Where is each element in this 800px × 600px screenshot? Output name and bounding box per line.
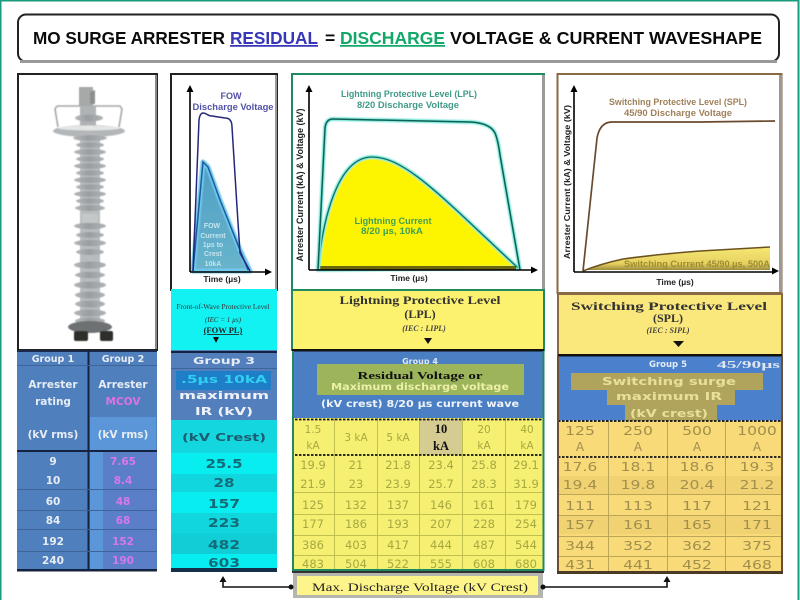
LPL values: 23 bbox=[349, 477, 363, 491]
group 1 column: 192 bbox=[42, 536, 64, 548]
axis labels: Arrester Current (kA) & Voltage (kV) bbox=[562, 105, 572, 259]
group 2 column: 7.65 bbox=[110, 456, 136, 468]
arrow: to SPL column bbox=[540, 576, 670, 590]
FOW current wave bbox=[193, 162, 250, 271]
SPL current headers: A bbox=[753, 440, 762, 454]
SPL current headers: A bbox=[634, 440, 643, 454]
panel: SPL header: (SPL) bbox=[653, 311, 683, 325]
panel: group 1 and 2 table bbox=[17, 350, 157, 572]
callout: max discharge voltage bbox=[293, 573, 543, 598]
LPL current headers: 1.5 bbox=[305, 424, 321, 436]
x axis label: Time (µs) bbox=[203, 274, 241, 284]
FOW voltage label bbox=[192, 91, 274, 112]
group 1 column: Arrester bbox=[28, 379, 78, 391]
LPL values: 132 bbox=[345, 498, 367, 512]
FOW voltage label: FOW bbox=[220, 91, 242, 101]
FOW current label: 1µs to bbox=[203, 242, 223, 249]
LPL values: 161 bbox=[473, 498, 495, 512]
panel: group 4 header bbox=[293, 352, 543, 418]
group 1 column: 240 bbox=[42, 555, 64, 567]
SPL column 500 A values: 20.4 bbox=[680, 479, 715, 492]
SPL current headers: 1000 bbox=[737, 425, 777, 438]
LPL values: 179 bbox=[515, 498, 537, 512]
panel: group 4 header: Group 4 bbox=[402, 357, 438, 366]
group 2 column: 68 bbox=[116, 515, 130, 527]
LPL values: 254 bbox=[515, 517, 537, 531]
panel: LPL header bbox=[292, 290, 544, 352]
current label: Lightning Current bbox=[354, 216, 432, 227]
SPL current headers bbox=[565, 425, 777, 454]
SPL voltage label bbox=[609, 97, 747, 119]
current label: 8/20 µs, 10kA bbox=[361, 226, 423, 237]
SPL current headers: A bbox=[693, 440, 702, 454]
SPL column 500 A values bbox=[680, 461, 715, 572]
LPL values: 228 bbox=[473, 517, 495, 531]
title: RESIDUAL bbox=[230, 28, 318, 48]
group 2 column: 48 bbox=[116, 496, 130, 508]
SPL column 500 A values: 165 bbox=[682, 519, 712, 532]
SPL column 500 A values: 18.6 bbox=[680, 461, 714, 474]
SPL column 500 A values: 117 bbox=[682, 500, 712, 513]
LPL values: 21.8 bbox=[385, 458, 411, 472]
LPL current headers: 5 kA bbox=[386, 432, 410, 444]
LPL values: 29.1 bbox=[513, 458, 539, 472]
panel: LPL header: Lightning Protective Level bbox=[340, 293, 501, 307]
SPL column 500 A values: 362 bbox=[682, 540, 712, 553]
voltage label: 8/20 Discharge Voltage bbox=[357, 100, 459, 111]
group 1 column bbox=[28, 354, 78, 567]
LPL current headers: 10 bbox=[435, 422, 447, 436]
LPL values: 23.9 bbox=[385, 477, 411, 491]
LPL values: 444 bbox=[430, 538, 452, 552]
LPL values: 177 bbox=[302, 517, 324, 531]
FOW voltage label: Discharge Voltage bbox=[192, 102, 274, 112]
panel: group 3 table: 28 bbox=[214, 476, 234, 490]
SPL column 125 A values: 431 bbox=[565, 559, 595, 572]
LPL current headers: kA bbox=[433, 439, 449, 453]
panel: SPL chart: Time (µs) bbox=[656, 277, 694, 287]
panel: group 5 header: Switching surge bbox=[602, 375, 736, 388]
LPL values: 386 bbox=[302, 538, 324, 552]
LPL current headers: 3 kA bbox=[344, 432, 368, 444]
SPL column 1000 A values: 468 bbox=[742, 559, 772, 572]
panel: FOW protective level header: Front-of-Wave Protective Level bbox=[176, 303, 270, 311]
group 2 column: (kV rms) bbox=[98, 429, 148, 441]
SPL current headers: 250 bbox=[623, 425, 653, 438]
LPL values: 417 bbox=[387, 538, 409, 552]
LPL current headers: 20 bbox=[477, 424, 491, 436]
group 2 column: 152 bbox=[112, 536, 134, 548]
chart axes bbox=[574, 90, 773, 272]
callout: max discharge voltage: Max. Discharge Voltage (kV Crest) bbox=[312, 580, 528, 594]
panel: SPL chart bbox=[558, 74, 782, 293]
panel: LPL chart bbox=[292, 74, 545, 290]
chart axes bbox=[309, 90, 532, 270]
group 1 column: 9 bbox=[49, 456, 57, 468]
FOW current label: Crest bbox=[204, 251, 223, 258]
SPL column 250 A values: 113 bbox=[623, 500, 653, 513]
panel: group 3 table: IR (kV) bbox=[195, 405, 253, 418]
panel: group 4 header: (kV crest) 8/20 µs current wave bbox=[321, 399, 519, 410]
SPL column 1000 A values: 21.2 bbox=[740, 479, 774, 492]
title: VOLTAGE & CURRENT WAVESHAPE bbox=[450, 28, 762, 48]
current label bbox=[354, 216, 432, 237]
LPL values: 487 bbox=[473, 538, 495, 552]
title: MO SURGE ARRESTER bbox=[33, 28, 225, 48]
LPL values: 483 bbox=[302, 557, 324, 571]
LPL current headers: kA bbox=[306, 440, 320, 452]
SPL column 250 A values: 161 bbox=[623, 519, 653, 532]
panel: FOW protective level header: (IEC = 1 µs) bbox=[205, 316, 242, 324]
SPL column 250 A values: 18.1 bbox=[621, 461, 655, 474]
SPL current headers: A bbox=[576, 440, 585, 454]
LPL current headers: 40 bbox=[520, 424, 534, 436]
title: = bbox=[325, 28, 335, 48]
group 1 column: Group 1 bbox=[32, 354, 74, 365]
FOW current label: 10kA bbox=[205, 261, 221, 268]
FOW current label: FOW bbox=[204, 223, 221, 230]
switching current wave bbox=[583, 247, 770, 271]
panel: LPL table bbox=[292, 351, 544, 573]
group 1 column: 10 bbox=[46, 475, 60, 487]
panel: LPL header: (LPL) bbox=[404, 307, 436, 321]
LPL values: 25.8 bbox=[471, 458, 497, 472]
LPL values: 544 bbox=[515, 538, 537, 552]
SPL column 1000 A values: 375 bbox=[742, 540, 772, 553]
group 1 column: rating bbox=[35, 396, 71, 408]
panel: SPL header: Switching Protective Level bbox=[571, 299, 768, 313]
panel: group 5 header: 45/90µs bbox=[717, 359, 781, 371]
SPL column 250 A values: 352 bbox=[623, 540, 653, 553]
chart axes bbox=[190, 90, 267, 272]
LPL values: 23.4 bbox=[428, 458, 454, 472]
title bbox=[18, 14, 779, 63]
LPL values: 137 bbox=[387, 498, 409, 512]
voltage label: Lightning Protective Level (LPL) bbox=[341, 89, 477, 100]
axis labels: Arrester Current (kA) & Voltage (kV) bbox=[295, 108, 305, 262]
SPL column 1000 A values: 19.3 bbox=[740, 461, 774, 474]
SPL column 125 A values: 19.4 bbox=[563, 479, 598, 492]
panel: group 3 table: 603 bbox=[208, 556, 240, 570]
panel: SPL table bbox=[557, 356, 783, 574]
group 1 column: 60 bbox=[46, 496, 60, 508]
group 2 column: Arrester bbox=[98, 379, 148, 391]
LPL values: 21 bbox=[349, 458, 363, 472]
FOW current label: Current bbox=[200, 233, 226, 240]
title: DISCHARGE bbox=[340, 28, 445, 48]
group 2 column bbox=[98, 354, 148, 567]
LPL values: 31.9 bbox=[513, 477, 539, 491]
SPL column 125 A values: 111 bbox=[565, 500, 595, 513]
SPL voltage label: 45/90 Discharge Voltage bbox=[624, 108, 732, 119]
group 2 column: 190 bbox=[112, 555, 134, 567]
LPL values: 21.9 bbox=[300, 477, 326, 491]
lightning current wave bbox=[318, 157, 518, 270]
LPL values: 146 bbox=[430, 498, 452, 512]
LPL values: 125 bbox=[302, 498, 324, 512]
panel: SPL header bbox=[558, 294, 782, 356]
panel: group 3 table bbox=[171, 350, 277, 572]
arrow: to FOW column bbox=[220, 576, 294, 590]
LPL values: 28.3 bbox=[471, 477, 497, 491]
LPL values: 555 bbox=[430, 557, 452, 571]
LPL current headers bbox=[305, 422, 534, 453]
panel: group 3 table: 157 bbox=[208, 497, 240, 511]
panel: SPL header: (IEC : SIPL) bbox=[646, 326, 690, 335]
panel: group 4 header: Maximum discharge voltage bbox=[331, 382, 509, 393]
SPL column 500 A values: 452 bbox=[682, 559, 712, 572]
panel: LPL chart: Time (µs) bbox=[390, 273, 428, 283]
LPL values: 19.9 bbox=[300, 458, 326, 472]
LPL values: 522 bbox=[387, 557, 409, 571]
panel: group 5 header bbox=[559, 356, 781, 421]
panel: group 3 table: Group 3 bbox=[193, 356, 255, 367]
group 2 column: Group 2 bbox=[102, 354, 144, 365]
FOW current label bbox=[200, 223, 226, 268]
SPL column 125 A values bbox=[563, 461, 598, 572]
LPL values: 186 bbox=[345, 517, 367, 531]
group 1 column: 84 bbox=[46, 515, 60, 527]
LPL values: 608 bbox=[473, 557, 495, 571]
LPL voltage wave bbox=[318, 119, 520, 270]
LPL values: 25.7 bbox=[428, 477, 454, 491]
SPL voltage label: Switching Protective Level (SPL) bbox=[609, 97, 747, 108]
SPL current headers: 125 bbox=[565, 425, 595, 438]
LPL values: 193 bbox=[387, 517, 409, 531]
LPL values: 403 bbox=[345, 538, 367, 552]
SPL column 125 A values: 344 bbox=[565, 540, 595, 553]
SPL voltage wave bbox=[583, 121, 775, 271]
panel: group 5 header: maximum IR bbox=[616, 390, 723, 403]
LPL current headers: kA bbox=[477, 440, 491, 452]
LPL values bbox=[300, 458, 539, 571]
SPL column 125 A values: 157 bbox=[565, 519, 595, 532]
FOW voltage wave bbox=[193, 113, 250, 271]
switching current label: Switching Current 45/90 µs, 500A bbox=[624, 259, 770, 270]
LPL values: 680 bbox=[515, 557, 537, 571]
panel: group 3 table: 482 bbox=[208, 538, 240, 552]
panel: FOW protective level header: (FOW PL) bbox=[204, 325, 243, 335]
SPL column 250 A values bbox=[621, 461, 655, 572]
SPL current headers: 500 bbox=[682, 425, 712, 438]
panel: FOW chart bbox=[171, 74, 277, 290]
SPL column 1000 A values: 121 bbox=[742, 500, 772, 513]
SPL column 125 A values: 17.6 bbox=[563, 461, 597, 474]
icon: surge arrester bbox=[53, 87, 125, 341]
panel: FOW protective level header bbox=[171, 289, 277, 350]
panel: LPL header: (IEC : LIPL) bbox=[402, 324, 446, 333]
panel: group 3 table: 25.5 bbox=[206, 457, 242, 471]
panel: group 4 header: Residual Voltage or bbox=[358, 370, 483, 382]
panel: group 3 table: .5µs 10kA bbox=[181, 373, 268, 386]
panel: arrester photo bbox=[18, 74, 157, 350]
panel: group 3 table: maximum bbox=[179, 389, 269, 402]
group 2 column: 8.4 bbox=[114, 475, 132, 487]
panel: group 5 header: Group 5 bbox=[649, 360, 687, 370]
panel: group 3 table: 223 bbox=[208, 516, 240, 530]
group 1 column: (kV rms) bbox=[28, 429, 78, 441]
SPL column 250 A values: 19.8 bbox=[621, 479, 655, 492]
LPL current headers: kA bbox=[520, 440, 534, 452]
voltage label bbox=[341, 89, 477, 111]
LPL values: 207 bbox=[430, 517, 452, 531]
panel: group 5 header: (kV crest) bbox=[630, 407, 708, 420]
panel: group 3 table: (kV Crest) bbox=[182, 431, 266, 444]
group 2 column: MCOV bbox=[106, 396, 141, 408]
LPL values: 504 bbox=[345, 557, 367, 571]
SPL column 1000 A values: 171 bbox=[742, 519, 772, 532]
SPL column 1000 A values bbox=[740, 461, 774, 572]
SPL column 250 A values: 441 bbox=[623, 559, 653, 572]
